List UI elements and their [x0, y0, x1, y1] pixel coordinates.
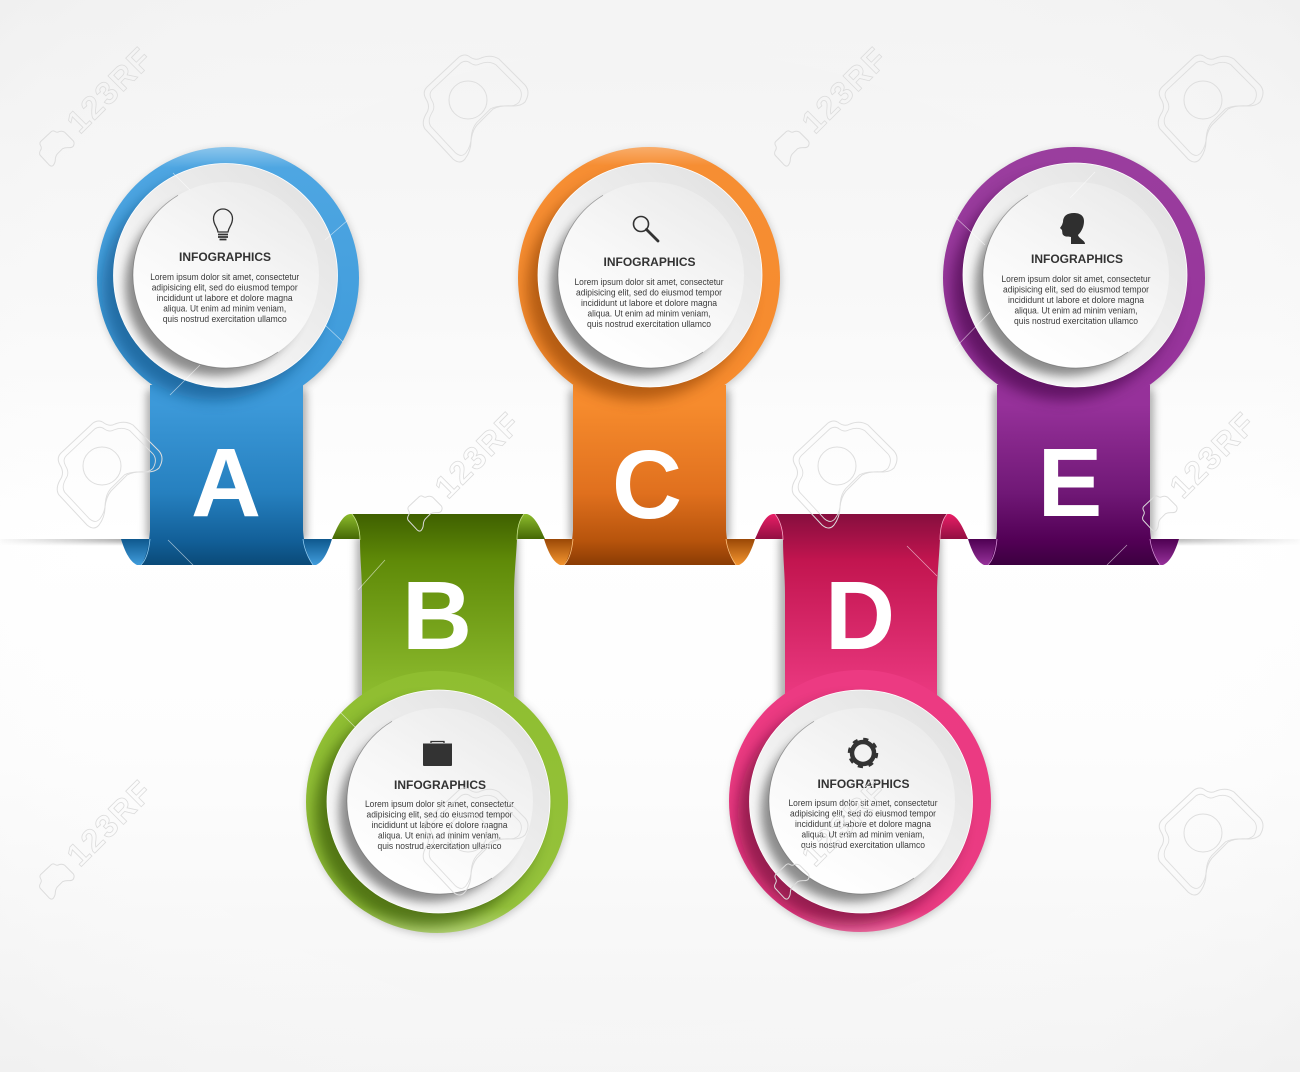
icon: head silhouette — [1060, 213, 1085, 244]
panel: step E — [943, 147, 1206, 565]
watermark: 123RF bottom left: 123RF — [59, 774, 158, 873]
text B: adipisicing elit, sed do eiusmod tempor — [366, 810, 513, 820]
text A: quis nostrud exercitation ullamco — [163, 314, 287, 324]
disc B — [327, 690, 550, 913]
watermark: 123RF right: 123RF — [1162, 406, 1261, 505]
text E: aliqua. Ut enim ad minim veniam, — [1014, 306, 1138, 316]
disc A — [114, 164, 338, 388]
text E: quis nostrud exercitation ullamco — [1014, 316, 1138, 326]
panel: step D — [729, 514, 992, 934]
title B: INFOGRAPHICS — [394, 780, 486, 792]
text A — [150, 272, 299, 324]
watermark: 123RF top middle — [775, 41, 893, 166]
icon: light bulb — [214, 209, 232, 240]
icon: briefcase — [423, 742, 452, 766]
letter C: C — [612, 430, 682, 539]
letter A: A — [191, 428, 261, 537]
watermark: 123RF top left — [40, 41, 158, 166]
ribbon B — [307, 514, 569, 935]
watermark: 123RF bottom middle — [775, 774, 893, 899]
text A: adipisicing elit, sed do eiusmod tempor — [152, 282, 298, 292]
ring B — [306, 671, 568, 933]
watermark: 123RF top left: 123RF — [59, 41, 158, 140]
title C: INFOGRAPHICS — [604, 257, 696, 269]
text C: aliqua. Ut enim ad minim veniam, — [588, 308, 710, 318]
watermark: 123RF bottom left — [40, 774, 158, 899]
ring D — [729, 670, 991, 932]
text A: incididunt ut labore et dolore magna — [157, 293, 293, 303]
text B — [365, 799, 514, 851]
text B: aliqua. Ut enim ad minim veniam, — [378, 830, 501, 840]
text C: incididunt ut labore et dolore magna — [581, 298, 717, 308]
disc C — [538, 163, 762, 387]
text A: Lorem ipsum dolor sit amet, consectetur — [150, 272, 299, 282]
text C: quis nostrud exercitation ullamco — [587, 319, 711, 329]
text B: incididunt ut labore et dolore magna — [372, 820, 508, 830]
text D: quis nostrud exercitation ullamco — [801, 840, 925, 850]
watermark: 123RF bottom middle: 123RF — [794, 774, 893, 873]
ribbon E — [944, 149, 1206, 565]
paper slit shadow right — [1177, 539, 1293, 546]
disc D — [750, 690, 972, 913]
text D: aliqua. Ut enim ad minim veniam, — [802, 830, 924, 840]
icon: magnifier — [634, 216, 658, 241]
text D: incididunt ut labore et dolore magna — [795, 819, 931, 829]
watermark: 123RF right — [1143, 406, 1261, 531]
ribbon A — [98, 149, 360, 565]
paper slit shadow left — [6, 539, 123, 546]
text E: adipisicing elit, sed do eiusmod tempor — [1003, 284, 1149, 294]
ribbon C — [519, 149, 781, 565]
text D: adipisicing elit, sed do eiusmod tempor — [790, 808, 936, 818]
text B: quis nostrud exercitation ullamco — [378, 841, 502, 851]
text E — [1002, 274, 1151, 326]
text E: Lorem ipsum dolor sit amet, consectetur — [1002, 274, 1151, 284]
panel: step C — [518, 147, 781, 565]
title D: INFOGRAPHICS — [818, 779, 910, 791]
text C — [574, 277, 724, 329]
title A: INFOGRAPHICS — [179, 252, 271, 264]
text A: aliqua. Ut enim ad minim veniam, — [163, 304, 286, 314]
letter B: B — [402, 561, 472, 670]
watermark: 123RF centre — [408, 406, 526, 531]
ring E — [943, 147, 1205, 409]
disc E — [963, 163, 1187, 387]
text C: adipisicing elit, sed do eiusmod tempor — [576, 288, 722, 298]
text D — [788, 798, 938, 850]
text E: incididunt ut labore et dolore magna — [1008, 295, 1144, 305]
icon: gear — [850, 740, 876, 766]
letter D: D — [825, 561, 895, 670]
text C: Lorem ipsum dolor sit amet, consectetur — [574, 277, 724, 287]
watermark: camera marks — [57, 55, 1263, 895]
watermark: 123RF top middle: 123RF — [794, 41, 893, 140]
panel: step A — [97, 147, 360, 565]
text D: Lorem ipsum dolor sit amet, consectetur — [788, 798, 938, 808]
ring A — [97, 147, 359, 409]
watermark: 123RF centre: 123RF — [427, 406, 526, 505]
letter E: E — [1038, 428, 1102, 537]
text B: Lorem ipsum dolor sit amet, consectetur — [365, 799, 514, 809]
panel: step B — [306, 514, 569, 935]
ring C — [518, 147, 780, 409]
ribbon D — [730, 514, 992, 934]
title E: INFOGRAPHICS — [1031, 254, 1123, 266]
